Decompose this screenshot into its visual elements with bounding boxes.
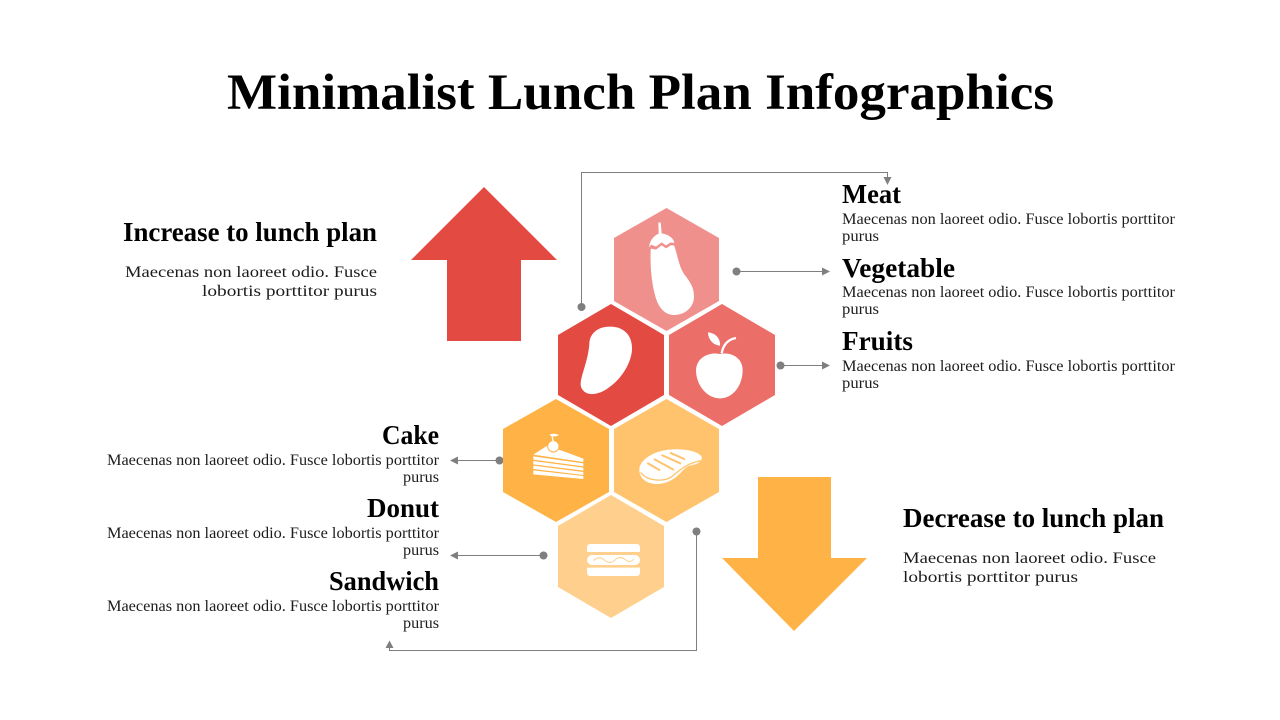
- hexagon: sandwich: [558, 495, 664, 618]
- icon: sandwich: [587, 544, 640, 576]
- text block: donut: [107, 493, 440, 559]
- arrow: increase up: [411, 187, 557, 341]
- text block: cake: purus: [403, 469, 439, 486]
- connector: eggplant to vegetable: [732, 268, 830, 276]
- text block: meat: [842, 179, 1176, 245]
- text block: meat: purus: [842, 228, 879, 245]
- text block: donut: Maecenas non laoreet odio. Fusce lobortis porttitor: [107, 525, 440, 542]
- text block: meat: Maecenas non laoreet odio. Fusce lobortis porttitor: [842, 211, 1176, 228]
- text block: sandwich: purus: [403, 615, 439, 632]
- panel: decrease to lunch plan: Decrease to lunch plan: [903, 503, 1164, 533]
- text block: fruits: Fruits: [842, 326, 913, 356]
- text block: sandwich: [107, 566, 440, 632]
- text block: donut: Donut: [367, 493, 439, 523]
- icon: bean: [581, 327, 632, 394]
- text block: cake: Cake: [382, 420, 439, 450]
- text block: vegetable: Maecenas non laoreet odio. Fusce lobortis porttitor: [842, 284, 1176, 301]
- text block: sandwich: Sandwich: [329, 566, 439, 596]
- text block: fruits: Maecenas non laoreet odio. Fusce lobortis porttitor: [842, 358, 1176, 375]
- panel: decrease to lunch plan: lobortis porttitor purus: [903, 569, 1078, 586]
- icon: eggplant: [649, 222, 694, 315]
- text block: cake: Maecenas non laoreet odio. Fusce lobortis porttitor: [107, 452, 440, 469]
- hexagon: apple: [669, 304, 775, 426]
- text block: fruits: [842, 326, 1176, 392]
- text block: sandwich: Maecenas non laoreet odio. Fusce lobortis porttitor: [107, 598, 440, 615]
- text block: fruits: purus: [842, 375, 879, 392]
- panel: increase to lunch plan: [123, 217, 377, 300]
- text block: vegetable: [842, 253, 1176, 318]
- connector: apple to fruits: [776, 362, 830, 370]
- hexagon: cake slice: [503, 399, 609, 522]
- panel: increase to lunch plan: Increase to lunch plan: [123, 217, 377, 247]
- panel: decrease to lunch plan: Maecenas non laoreet odio. Fusce: [903, 550, 1156, 567]
- text block: vegetable: purus: [842, 301, 879, 318]
- title: Minimalist Lunch Plan Infographics: [227, 65, 1054, 121]
- panel: decrease to lunch plan: [903, 503, 1164, 586]
- hexagon: bean: [558, 304, 664, 426]
- icon: steak: [639, 449, 702, 484]
- text block: meat: Meat: [842, 179, 901, 209]
- icon: apple: [696, 332, 743, 398]
- hexagon: eggplant: [614, 208, 719, 331]
- connector: bean to meat: [578, 172, 892, 311]
- text block: vegetable: Vegetable: [842, 253, 955, 283]
- connector: sandwich to donut: [450, 552, 548, 560]
- connector: steak to sandwich: [386, 528, 700, 650]
- hexagon: steak: [614, 399, 719, 522]
- icon: cake slice: [533, 434, 583, 479]
- text block: donut: purus: [403, 542, 439, 559]
- arrow: decrease down: [722, 477, 867, 631]
- text block: cake: [107, 420, 440, 486]
- panel: increase to lunch plan: Maecenas non laoreet odio. Fusce: [125, 264, 377, 281]
- panel: increase to lunch plan: lobortis porttitor purus: [202, 283, 377, 300]
- connector: cake slice to cake: [450, 456, 504, 464]
